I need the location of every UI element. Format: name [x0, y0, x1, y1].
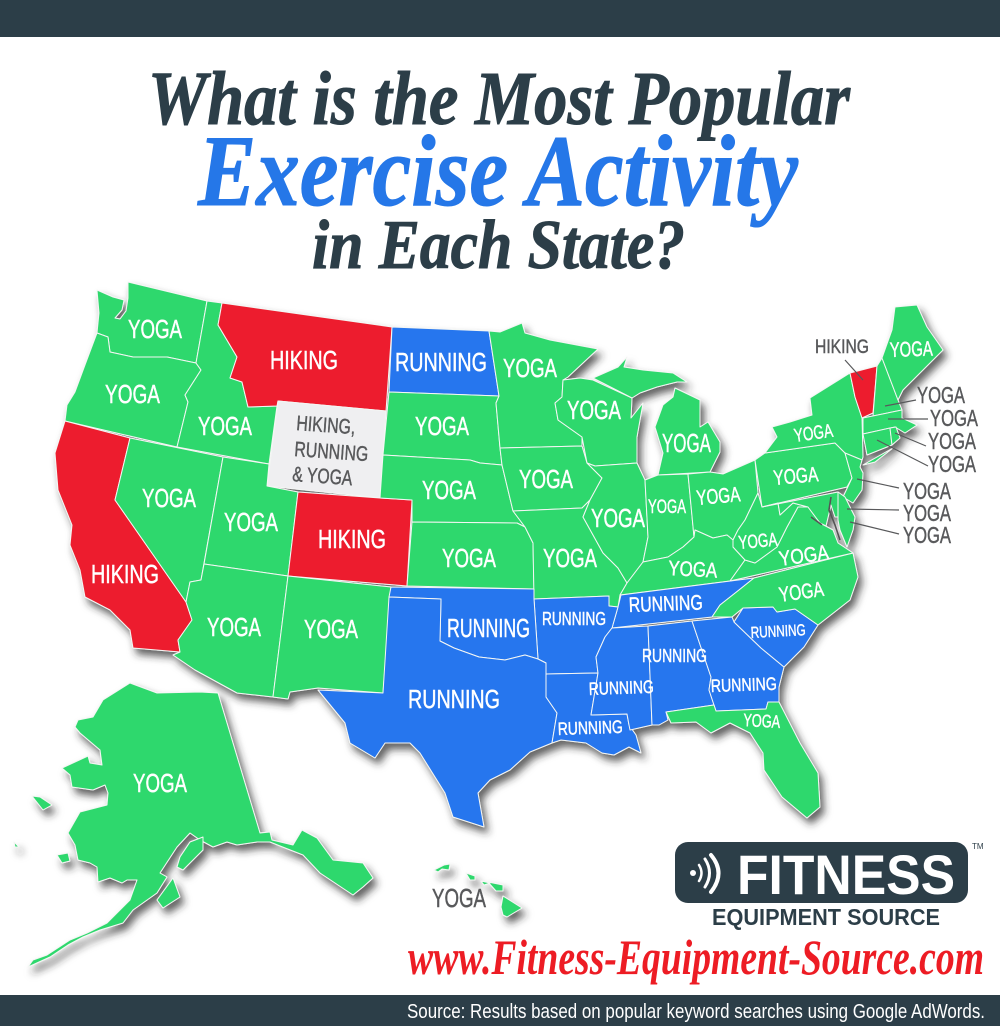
- state labels: central and eastern states: YOGA: [793, 421, 835, 447]
- Rhode Island: [890, 427, 900, 445]
- Alabama: [648, 621, 714, 725]
- leader lines and outside labels for small states: YOGA: [903, 522, 951, 548]
- leader lines and outside labels for small states: YOGA: [928, 451, 976, 477]
- state labels: central and eastern states: YOGA: [442, 543, 496, 573]
- leader lines and outside labels for small states: YOGA: [917, 382, 965, 408]
- state labels: central and eastern states: YOGA: [543, 543, 597, 573]
- Arizona: [173, 564, 288, 697]
- state labels: western states: YOGA: [198, 411, 252, 441]
- state labels: central and eastern states: RUNNING: [447, 613, 530, 643]
- state labels: central and eastern states: RUNNING: [395, 347, 487, 377]
- state labels: central and eastern states: YOGA: [415, 411, 469, 441]
- Mississippi: [591, 626, 652, 730]
- Wyoming label: HIKING,: [296, 412, 356, 439]
- Ohio: [688, 460, 758, 540]
- Nevada: [115, 438, 223, 602]
- leader lines and outside labels for small states: HIKING: [815, 337, 869, 358]
- West Virginia: [733, 493, 808, 563]
- New Hampshire: [873, 358, 902, 416]
- state labels: western states: [91, 314, 386, 644]
- state labels: central and eastern states: RUNNING: [628, 591, 703, 617]
- Maine: [882, 305, 943, 400]
- Wisconsin: [555, 378, 643, 466]
- New York: [765, 373, 863, 460]
- state labels: central and eastern states: YOGA: [648, 497, 686, 518]
- state labels: central and eastern states: RUNNING: [750, 622, 806, 642]
- leader lines and outside labels for small states: [432, 337, 978, 913]
- Oregon: [65, 333, 201, 447]
- state labels: western states: HIKING: [318, 524, 386, 554]
- state labels: central and eastern states: YOGA: [777, 578, 825, 607]
- state labels: central and eastern states: YOGA: [503, 353, 557, 383]
- state labels: western states: YOGA: [304, 614, 358, 644]
- Louisiana: [546, 673, 641, 755]
- Indiana: [643, 474, 694, 562]
- Wyoming label: [292, 412, 369, 490]
- Kansas: [407, 522, 534, 589]
- Delaware and eastern shore: [838, 492, 855, 547]
- state labels: western states: YOGA: [207, 612, 261, 642]
- state labels: central and eastern states: [133, 338, 933, 798]
- Connecticut: [863, 428, 892, 455]
- Arkansas: [534, 596, 618, 674]
- Wyoming label: RUNNING: [294, 438, 369, 466]
- title: [148, 57, 851, 284]
- California: [55, 421, 192, 652]
- state labels: central and eastern states: RUNNING: [408, 684, 500, 714]
- Chesapeake Bay: [811, 497, 840, 540]
- logo badge: [675, 842, 968, 903]
- logo wordmark: FITNESS: [737, 843, 955, 906]
- Iowa: [500, 446, 602, 511]
- Wyoming: [267, 401, 386, 498]
- Florida: [666, 702, 820, 818]
- footer bar: [0, 995, 1000, 1026]
- state labels: western states: YOGA: [105, 379, 160, 409]
- leader lines and outside labels for small states: YOGA: [930, 405, 978, 431]
- North Carolina: [712, 553, 858, 625]
- state labels: central and eastern states: RUNNING: [588, 677, 654, 699]
- New Jersey: [843, 453, 863, 503]
- title: Exercise Activity: [197, 115, 799, 228]
- Virginia: [730, 507, 853, 581]
- Long Island: [863, 448, 893, 465]
- leader lines and outside labels for small states: YOGA: [903, 500, 951, 526]
- Nebraska: [380, 455, 525, 527]
- state labels: central and eastern states: RUNNING: [557, 717, 623, 739]
- Pennsylvania: [755, 443, 852, 507]
- Hawaii islands: [434, 864, 522, 917]
- leader lines and outside labels for small states: YOGA: [928, 428, 976, 454]
- Illinois: [583, 463, 648, 583]
- state labels: central and eastern states: YOGA: [567, 395, 621, 425]
- Wyoming label: & YOGA: [292, 463, 353, 490]
- New Mexico: [273, 576, 391, 699]
- logo: [675, 842, 984, 930]
- Minnesota: [489, 323, 598, 448]
- state labels: western states: YOGA: [128, 314, 182, 344]
- South Carolina: [734, 607, 818, 667]
- Georgia: [692, 617, 784, 711]
- state labels: central and eastern states: YOGA: [772, 463, 819, 490]
- Washington: [97, 282, 207, 363]
- logo tagline: EQUIPMENT SOURCE: [712, 904, 940, 930]
- state labels: central and eastern states: YOGA: [889, 338, 933, 362]
- Missouri: [513, 500, 627, 607]
- North Dakota: [389, 327, 499, 396]
- state labels: western states: YOGA: [142, 483, 196, 513]
- South Dakota: [383, 392, 502, 465]
- title: What is the Most Popular: [148, 57, 851, 141]
- Idaho: [177, 301, 277, 464]
- state labels: central and eastern states: YOGA: [777, 541, 830, 571]
- top bar: [0, 0, 1000, 37]
- state labels: central and eastern states: RUNNING: [542, 609, 606, 629]
- state labels: central and eastern states: YOGA: [743, 710, 781, 732]
- Alaska islands: [14, 796, 203, 908]
- Oklahoma: [389, 587, 538, 660]
- Utah: [204, 457, 298, 576]
- Tennessee: [612, 578, 754, 628]
- Alaska: [28, 683, 373, 967]
- Maryland: [762, 492, 846, 526]
- state labels: western states: HIKING: [91, 559, 159, 589]
- Montana: [218, 303, 392, 411]
- state labels: western states: YOGA: [224, 507, 278, 537]
- state labels: central and eastern states: YOGA: [519, 464, 573, 494]
- state labels: central and eastern states: YOGA: [668, 557, 718, 583]
- state labels: central and eastern states: YOGA: [738, 530, 779, 554]
- state labels: central and eastern states: YOGA: [695, 483, 741, 510]
- title: in Each State?: [312, 207, 685, 284]
- trademark: TM: [972, 842, 984, 851]
- Kentucky: [620, 530, 745, 595]
- leader lines and outside labels for small states: YOGA: [903, 478, 951, 504]
- Texas: [318, 597, 557, 827]
- Colorado: [288, 492, 412, 586]
- Massachusetts: [863, 410, 917, 434]
- state labels: western states: HIKING: [270, 345, 338, 375]
- state labels: central and eastern states: YOGA: [662, 428, 711, 458]
- Vermont: [850, 366, 877, 418]
- leader lines and outside labels for small states: YOGA: [432, 883, 486, 913]
- state labels: central and eastern states: RUNNING: [642, 646, 707, 666]
- icon: signal waves: [690, 855, 718, 892]
- state labels: central and eastern states: RUNNING: [710, 674, 777, 696]
- map of US states: [14, 282, 943, 967]
- state labels: central and eastern states: YOGA: [422, 475, 476, 505]
- Michigan lower: [655, 388, 720, 475]
- Michigan upper: [593, 357, 687, 398]
- state labels: central and eastern states: YOGA: [133, 768, 187, 798]
- state labels: central and eastern states: YOGA: [591, 503, 645, 533]
